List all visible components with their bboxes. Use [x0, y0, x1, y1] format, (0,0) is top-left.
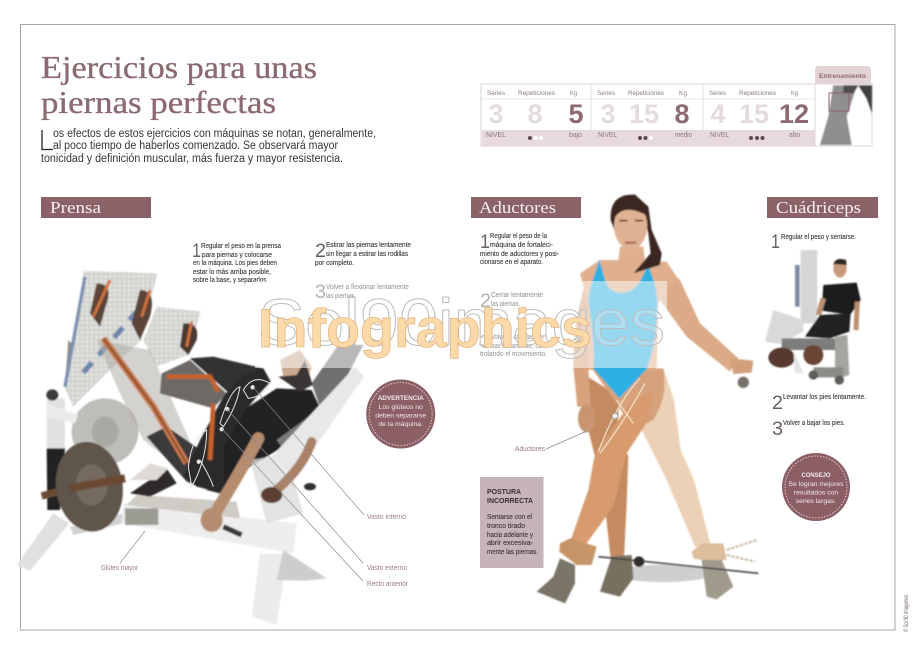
press step 3: 3 [315, 282, 326, 303]
quadriceps step 2: 2 [772, 393, 783, 414]
level low column [486, 90, 584, 140]
press step 1: para piernas y colocarse [202, 252, 272, 259]
level high column: Series [709, 90, 727, 97]
watermark orange text: Infographics [258, 297, 592, 359]
title [41, 49, 317, 120]
advice badge: Se logran mejores [788, 481, 844, 488]
intro text block [41, 128, 376, 165]
advice badge: series largas. [796, 498, 836, 505]
adductor step 1 [480, 232, 560, 266]
warning badge: ADVERTENCIA [378, 395, 424, 402]
quadriceps step 1 [771, 232, 856, 253]
press step 1: 1 [192, 241, 201, 262]
level low column: bajo [569, 132, 582, 139]
watermark band [255, 281, 667, 368]
warning badge [366, 380, 435, 448]
press step 3 [315, 282, 409, 303]
adductor step 2: las piernas. [491, 301, 520, 308]
press muscle labels: Vasto externo [367, 565, 407, 572]
intro text block: os efectos de estos ejercicios con máquinas se notan, generalmente, [53, 128, 376, 140]
training tab with knee photo: Entrenamiento [819, 73, 866, 80]
press step 1 [192, 241, 281, 284]
section heading: Cuadriceps [767, 197, 878, 218]
level low column: 8 [527, 99, 543, 129]
incorrect posture box: abrir excesiva- [487, 540, 534, 547]
muscle outlines [188, 380, 270, 487]
quadriceps step 2: Levantar los pies lentamente. [783, 394, 866, 401]
press muscle labels: Glúteo mayor [101, 565, 139, 572]
level high column: Kg [791, 90, 798, 97]
press step 2: 2 [315, 241, 326, 262]
adductor step 3 [480, 332, 548, 358]
press step 1: estar lo más arriba posible, [193, 269, 271, 276]
section heading: Cuadriceps: Cuádriceps [776, 198, 861, 217]
level low column: 5 [568, 99, 584, 129]
level medium column [597, 90, 692, 140]
warning badge: Los glúteos no [379, 404, 423, 411]
woman photo [537, 195, 758, 603]
level high column: alto [789, 132, 800, 139]
adductor step 3: nas lentamente, con- [491, 343, 548, 350]
advice badge [782, 453, 850, 521]
quadriceps step 3: Volver a bajar los pies. [783, 420, 845, 427]
quadriceps step 1: 1 [771, 232, 780, 253]
adductor step 1: miento de aductores y posi- [480, 251, 560, 258]
level low column: Kg [570, 90, 577, 97]
press muscle labels: Vasto interno [367, 514, 406, 521]
section heading: Aductores [471, 197, 581, 218]
adductor step 1: 1 [480, 232, 490, 253]
level high column: 15 [739, 99, 769, 129]
incorrect posture box: mente las piernas. [487, 549, 538, 556]
level low column: NIVEL [486, 132, 506, 139]
intro text block: al poco tiempo de haberlos comenzado. Se observará mayor [53, 140, 338, 152]
incorrect posture box: INCORRECTA [487, 496, 534, 505]
advice badge: resultados con [794, 490, 838, 496]
press step 1: Regular el peso en la prensa [201, 243, 281, 250]
adductor leader and label [515, 431, 587, 453]
press step 2 [315, 241, 411, 267]
level medium column: Kg [679, 90, 687, 97]
level medium column: 3 [600, 99, 616, 129]
leader lines for press muscles [120, 387, 364, 581]
press muscle labels: Recto anterior [367, 581, 409, 588]
quadriceps machine photo [765, 250, 861, 385]
level high column: 4 [710, 99, 726, 129]
adductor leader and label: Aductores [515, 446, 545, 453]
press muscle labels [101, 514, 409, 588]
level medium column: NIVEL [598, 132, 617, 139]
level low column: Series [487, 90, 506, 97]
quadriceps step 3: 3 [772, 419, 783, 440]
section heading: Aductores: Aductores [479, 198, 556, 217]
press step 2: sin llegar a estirar las rodillas [326, 251, 408, 258]
adductor step 1: Regular el peso de la [490, 233, 547, 240]
watermark outline text: Sol90images [258, 285, 665, 359]
muscle outlines [598, 378, 645, 453]
level medium column: 15 [629, 99, 659, 129]
adductor step 3: 3 [480, 332, 491, 353]
quadriceps step 2 [772, 393, 866, 414]
title: Ejercicios para unas [41, 49, 317, 85]
adductor step 1: máquina de fortaleci- [490, 242, 554, 249]
press step 3: Volver a flexionar lentamente [326, 284, 409, 291]
incorrect posture box: POSTURA [487, 487, 522, 496]
advice badge: CONSEJO [802, 472, 830, 479]
press step 1: en la máquina. Los pies deben [193, 260, 277, 267]
adductor step 1: cionarse en el aparato. [480, 259, 543, 266]
adductor step 2: 2 [480, 291, 491, 312]
level low column: 3 [488, 99, 504, 129]
quadriceps step 3 [772, 419, 845, 440]
copyright: © Sol 90 Imágenes [903, 595, 910, 632]
level medium column: Repeticiones [628, 90, 665, 97]
adductor step 2: Cerrar lentamente [491, 292, 543, 299]
section heading: Prensa [41, 197, 151, 218]
warning badge: deben separarse [375, 412, 426, 420]
training level table [481, 84, 815, 146]
level high column: Repeticiones [739, 90, 777, 97]
press step 3: las piernas. [326, 293, 356, 300]
level high column: NIVEL [710, 132, 729, 139]
warning badge: de la máquina. [378, 421, 423, 428]
training tab with knee photo [815, 66, 872, 146]
level low column: Repeticiones [518, 90, 556, 97]
adductor step 3: Volver a abrir las pier- [491, 334, 548, 341]
level high column: 12 [779, 99, 809, 129]
press step 1: sobre la base, y separarlos. [193, 277, 268, 284]
incorrect posture box: hacia adelante y [487, 532, 533, 539]
incorrect posture box: tronco tirado [487, 523, 525, 530]
quadriceps step 1: Regular el peso y sentarse. [781, 234, 856, 241]
section heading: Prensa: Prensa [50, 198, 102, 217]
level medium column: medio [675, 132, 692, 139]
adductor step 3: trolando el movimiento. [480, 351, 547, 358]
intro text block: tonicidad y definición muscular, más fuerza y mayor resistencia. [41, 153, 343, 165]
incorrect posture box: Sentarse con el [487, 514, 532, 521]
level high column [709, 90, 809, 140]
level medium column: 8 [674, 99, 690, 129]
incorrect posture box [480, 477, 544, 568]
press step 2: Estirar las piernas lentamente [326, 242, 411, 249]
level medium column: Series [597, 90, 616, 97]
title: piernas perfectas [41, 84, 276, 120]
leg press photo [17, 271, 364, 625]
press step 2: por completo. [315, 260, 354, 267]
adductor step 2 [480, 291, 543, 312]
